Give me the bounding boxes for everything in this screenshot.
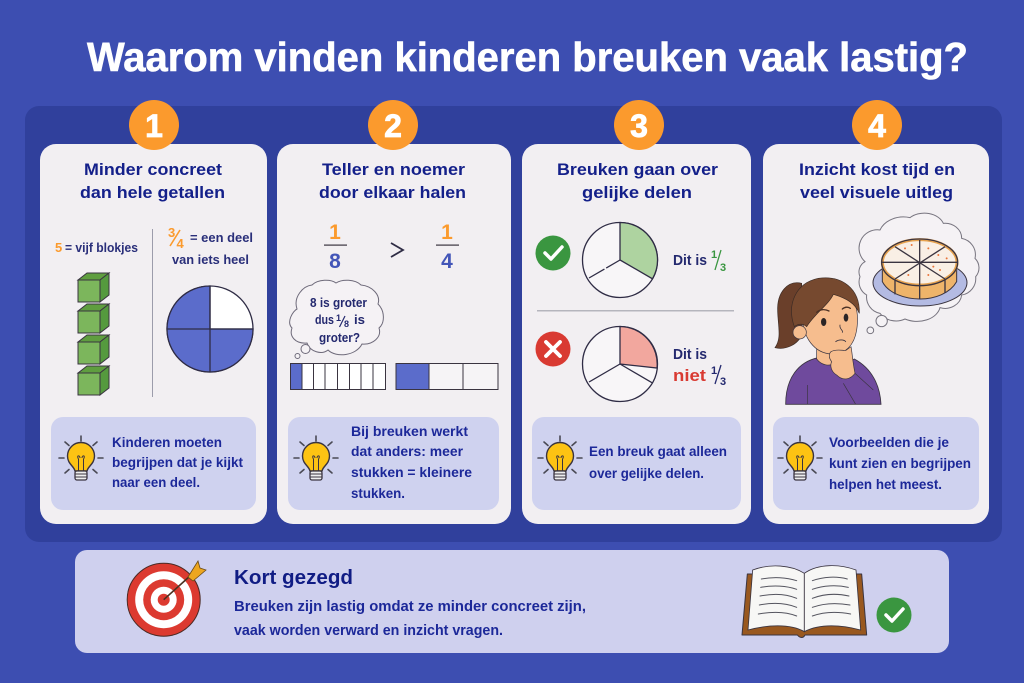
heading 1: Minder concreet xyxy=(84,160,222,179)
tip 2: stukken = kleinere xyxy=(351,465,472,480)
heading 1 xyxy=(80,160,225,202)
icon: target with arrow xyxy=(127,561,206,636)
number badge 2 xyxy=(368,100,418,150)
icon: red cross xyxy=(536,332,570,366)
thought bubble: 1 xyxy=(336,313,341,323)
thought bubble xyxy=(290,280,383,358)
thought bubble: groter? xyxy=(319,331,360,345)
number badge 3 xyxy=(614,100,664,150)
heading 2: Teller en noemer xyxy=(322,160,465,179)
bar: eight parts xyxy=(290,364,386,390)
label: vijf blokjes: 5 xyxy=(55,240,62,255)
label: drie vierde: = een deel xyxy=(190,230,253,245)
summary text: vaak worden verward en inzicht vragen. xyxy=(234,623,503,639)
panel: dark backdrop xyxy=(25,106,1002,542)
heading 3 xyxy=(557,160,718,202)
tip 1: Kinderen moeten xyxy=(112,435,222,450)
fraction one eighth xyxy=(324,221,347,273)
heading 4: Inzicht kost tijd en xyxy=(799,160,955,179)
tip 3 xyxy=(532,417,741,510)
heading 1: dan hele getallen xyxy=(80,183,225,202)
tip 1: begrijpen dat je kijkt xyxy=(112,455,244,470)
icon: green check xyxy=(876,598,912,632)
tip 4: helpen het meest. xyxy=(829,477,942,492)
title: Waarom vinden kinderen breuken vaak lastig? xyxy=(87,34,968,80)
icon: stacked green cubes xyxy=(78,273,109,395)
chart: circle three quarters xyxy=(167,286,253,372)
tip 1: naar een deel. xyxy=(112,475,200,490)
panel: card 1 xyxy=(40,100,267,524)
tip 2 xyxy=(288,417,499,510)
number badge 3: 3 xyxy=(630,108,648,144)
heading 4 xyxy=(799,160,955,202)
tip 3: Een breuk gaat alleen xyxy=(589,444,727,459)
number badge 4: 4 xyxy=(868,108,886,144)
chart: equal thirds xyxy=(582,222,658,298)
label: dit is een derde: 1 xyxy=(711,249,717,261)
tip 2: dat anders: meer xyxy=(351,444,464,459)
number badge 2: 2 xyxy=(384,108,402,144)
label: dit is niet een derde xyxy=(673,346,726,388)
heading 2: door elkaar halen xyxy=(319,183,466,202)
icon: open book xyxy=(742,566,867,637)
summary text: Breuken zijn lastig omdat ze minder concreet zijn, xyxy=(234,599,586,615)
label: dit is niet een derde: 1 xyxy=(711,365,717,377)
label: dit is niet een derde: 3 xyxy=(720,376,726,388)
number badge 4 xyxy=(852,100,902,150)
tip 3: over gelijke delen. xyxy=(589,466,704,481)
fraction one quarter xyxy=(436,221,459,273)
tip 4: kunt zien en begrijpen xyxy=(829,456,971,471)
tip 1 xyxy=(51,417,256,510)
label: vijf blokjes: = vijf blokjes xyxy=(65,240,138,255)
heading 3: Breuken gaan over xyxy=(557,160,718,179)
number badge 1 xyxy=(129,100,179,150)
thought bubble: is xyxy=(354,313,365,327)
fraction one quarter: 4 xyxy=(441,250,453,273)
number badge 1: 1 xyxy=(145,108,163,144)
thought bubble: dus xyxy=(315,313,334,327)
thought cloud with cake xyxy=(859,213,979,334)
label: dit is niet een derde: Dit is xyxy=(673,346,707,363)
label: drie vierde: 4 xyxy=(176,236,184,251)
panel: card 2 xyxy=(277,100,511,524)
fraction one eighth: 1 xyxy=(329,221,341,244)
chart: unequal parts xyxy=(582,326,658,402)
tip 2: Bij breuken werkt xyxy=(351,424,469,439)
label: drie vierde: van iets heel xyxy=(172,252,249,267)
tip 4 xyxy=(773,417,979,510)
icon: green check xyxy=(536,236,570,270)
panel: card 3 xyxy=(522,100,751,524)
label: dit is een derde xyxy=(673,249,726,274)
thought bubble: 8 is groter xyxy=(310,296,367,310)
panel: card 4 xyxy=(763,100,989,524)
illustration: thinking girl xyxy=(775,278,881,404)
heading 3: gelijke delen xyxy=(582,183,692,202)
label: dit is niet een derde: niet xyxy=(673,366,706,385)
tip 4: Voorbeelden die je xyxy=(829,435,949,450)
panel: summary xyxy=(75,550,949,653)
thought bubble: 8 xyxy=(344,319,349,329)
label: dit is een derde: 3 xyxy=(720,262,726,274)
fraction one eighth: 8 xyxy=(329,250,341,273)
heading: kort gezegd: Kort gezegd xyxy=(234,567,353,589)
heading 2 xyxy=(319,160,466,202)
label: dit is een derde: Dit is xyxy=(673,252,707,269)
fraction one quarter: 1 xyxy=(441,221,453,244)
label: drie vierde xyxy=(168,225,253,267)
heading 4: veel visuele uitleg xyxy=(800,183,953,202)
summary text xyxy=(234,599,586,639)
greater than sign xyxy=(391,243,403,257)
label: drie vierde: 3 xyxy=(168,225,175,240)
tip 2: stukken. xyxy=(351,486,405,501)
bar: four parts xyxy=(396,364,498,390)
